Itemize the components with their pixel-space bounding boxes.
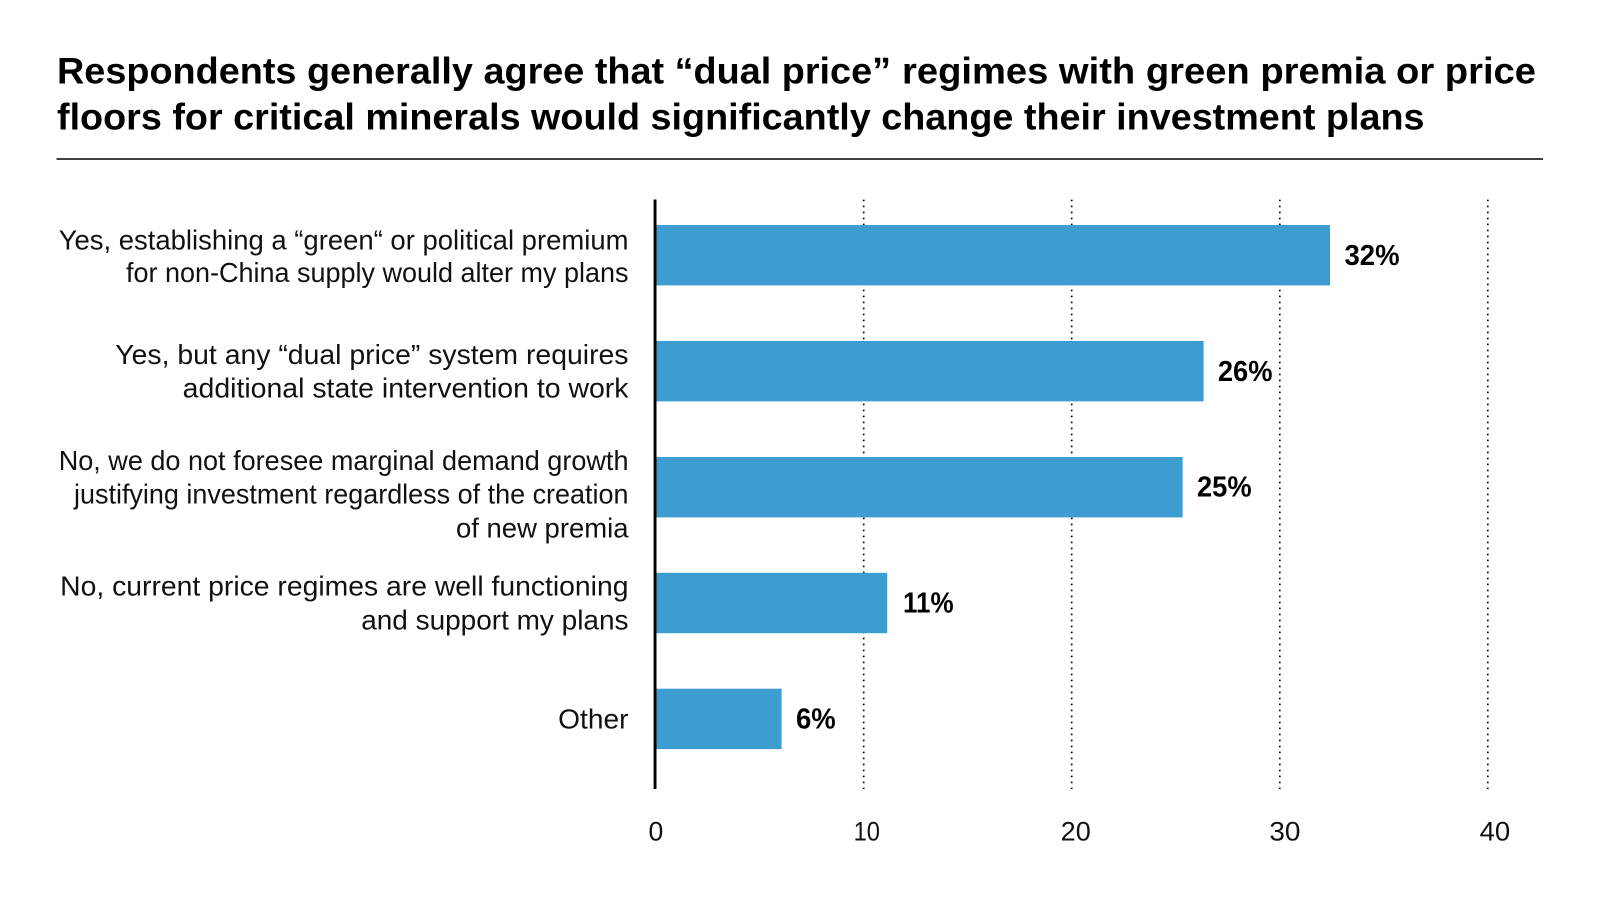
value labels: 26% bbox=[1218, 356, 1272, 388]
title: Respondents generally agree that “dual price” bbox=[57, 50, 891, 92]
category labels: Yes, establishing a “green“ or political premium bbox=[59, 224, 628, 255]
category labels bbox=[59, 224, 630, 734]
value labels: 32% bbox=[1344, 240, 1400, 272]
value labels: 6% bbox=[796, 704, 836, 736]
x-axis labels: 0 bbox=[648, 816, 663, 846]
value labels bbox=[796, 240, 1400, 736]
x-axis labels: 40 bbox=[1480, 816, 1510, 846]
category labels: for non-China supply would alter my plans bbox=[126, 257, 628, 288]
category labels: justifying investment regardless of the creation bbox=[73, 479, 628, 510]
vertical axis bbox=[654, 200, 656, 789]
x-axis labels: 20 bbox=[1061, 816, 1091, 846]
x-axis labels: 10 bbox=[854, 816, 880, 846]
value labels: 25% bbox=[1197, 472, 1252, 504]
category labels: and support my plans bbox=[361, 605, 628, 636]
title: floors for critical minerals would significantly change their investment plans bbox=[57, 96, 1424, 138]
category labels: No, current price regimes are well functioning bbox=[60, 571, 628, 602]
title: regimes with green premia or price bbox=[902, 50, 1536, 92]
category labels: Yes, but any “dual price” system requires bbox=[115, 339, 629, 370]
category labels: additional state intervention to work bbox=[183, 372, 630, 403]
x-axis labels bbox=[648, 816, 1510, 846]
category labels: Other bbox=[558, 703, 628, 734]
x-axis labels: 30 bbox=[1269, 816, 1300, 846]
category labels: of new premia bbox=[456, 512, 629, 543]
value labels: 11% bbox=[903, 588, 954, 620]
bar chart bbox=[59, 200, 1510, 846]
bars bbox=[655, 225, 1330, 749]
title bbox=[57, 50, 1536, 138]
category labels: No, we do not foresee marginal demand growth bbox=[59, 445, 628, 476]
